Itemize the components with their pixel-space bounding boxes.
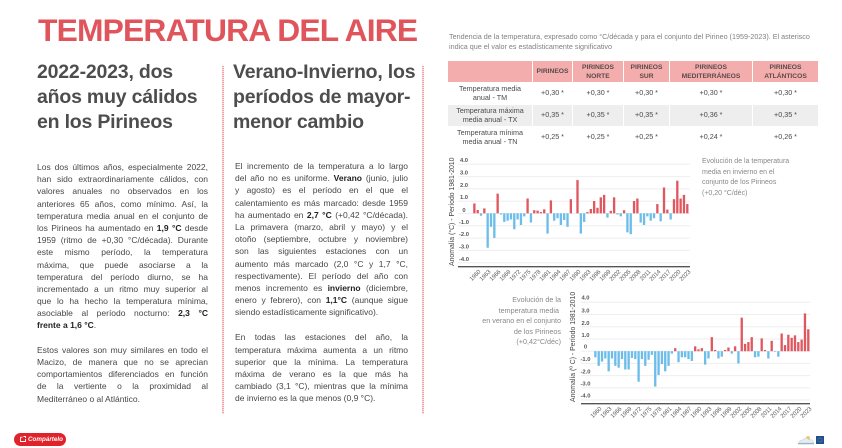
text block: left column: este mismo período, la temperatura [37,247,208,257]
text block: left column [37,162,208,404]
bar chart: summer anomaly: 1972 [630,406,643,420]
bar chart: winter anomaly: -3.0 [459,244,469,250]
table: temperature trends: SUR [639,72,654,80]
text block: left column: los Pirineos ha aumentado en 1,9 °C desde [37,223,208,233]
column divider left [222,66,224,414]
bar chart: summer anomaly: 2008 [750,406,764,420]
bar chart: summer anomaly: -1.0 [580,357,590,363]
table: temperature trends: PIRINEOS [537,68,568,75]
table: temperature trends: +0,35 * [586,110,609,119]
bar chart: winter anomaly: 1999 [599,269,612,283]
bar chart: summer anomaly: 2002 [730,406,743,420]
text block: left column: incrementado a un ritmo muy superior al [37,284,208,294]
table: temperature trends: +0,35 * [541,110,564,119]
bar chart: winter anomaly: 2020 [669,269,683,283]
text block: middle column: aumento más marcado (2,0 °C y 1,7 °C, [235,258,408,268]
bar chart: winter anomaly: 1975 [519,269,533,283]
bar chart: winter anomaly: 1981 [539,269,552,283]
table: temperature trends: Temperatura mínima [457,128,523,137]
chart note: winter: media en invierno en el [702,168,774,176]
text block: left column: temperatura del período diurno, se ha [37,272,208,282]
text block: left column: Estos valores son muy similares en todo el [37,345,208,355]
table: temperature trends: +0,30 * [700,88,722,97]
chart note: winter [702,158,790,196]
table: temperature trends: PIRINEOS [631,64,662,70]
chart note: winter: Evolución de la temperatura [702,158,789,165]
chart note: summer: Evolución de la [512,295,561,304]
chart note: summer: temperatura media [499,306,559,314]
text block: middle column: superior que la mínima. La temperatura [235,357,408,367]
table: temperature trends: Temperatura media [459,84,521,93]
text block: middle column: En todas las estaciones del año, la [235,332,408,342]
bar chart: winter anomaly: 4.0 [460,158,468,164]
table: temperature trends: +0,35 * [635,110,658,119]
bar chart: winter anomaly: 2008 [629,269,643,283]
bar chart: winter anomaly: 1978 [529,269,543,283]
text block: left column: Los dos últimos años, especialmente 2022, [37,162,208,172]
bar chart: winter anomaly: 1969 [499,269,512,283]
bar chart: summer anomaly: -4.0 [580,394,590,400]
table: temperature trends: +0,30 * [586,88,609,97]
text block: left column: asociable al período nocturno: 2,3 °C [37,308,208,318]
table: temperature trends: +0,30 * [635,88,658,97]
heading: verano-invierno: períodos de mayor- [233,86,410,108]
bar chart: summer anomaly: 4.0 [581,296,590,302]
bar chart: winter anomaly [448,157,693,283]
table: temperature trends: PIRINEOS [582,64,614,70]
bar chart: winter anomaly: 0 [462,208,466,214]
table: temperature trends: +0,25 * [586,132,609,141]
text block: middle column: y agosto) es el período en el que el [235,185,408,195]
bar chart: winter anomaly: 1972 [509,269,522,283]
heading: verano-invierno: Verano-Invierno, los [233,61,415,83]
heading: verano-invierno [233,61,415,133]
bar chart: winter anomaly: 1.0 [460,195,468,201]
bar chart: winter anomaly: 1966 [489,269,503,283]
text block: middle column: temperatura máxima aumenta a un ritmo [235,345,408,355]
table: temperature trends: ATLÁNTICOS [764,72,807,80]
bar chart: winter anomaly: -4.0 [459,257,469,263]
table: temperature trends: Temperatura máxima [456,106,524,115]
heading: 2022-2023: en los Pirineos [37,111,173,133]
heading: 2022-2023 [37,61,197,133]
bar chart: summer anomaly: 1975 [640,406,654,420]
bar chart: winter anomaly: 1987 [559,269,572,283]
text block: left column: Macizo, de manera que no se aprecian [37,357,208,367]
bar chart: summer anomaly: 0 [584,345,587,351]
heading: verano-invierno: menor cambio [233,111,364,133]
bar chart: summer anomaly: 1990 [690,406,704,420]
bar chart: winter anomaly: 2023 [679,269,693,283]
text block: middle column [235,161,408,403]
table caption: indica que el valor es estadísticamente significativo [449,42,612,51]
table: temperature trends: +0,25 * [635,132,658,141]
heading: 2022-2023: años muy cálidos [37,86,197,108]
table: temperature trends: media anual - TN [462,136,518,146]
table: temperature trends: +0,36 * [700,110,722,119]
bar chart: winter anomaly: 3.0 [460,170,468,176]
bar chart: summer anomaly: 2020 [790,406,804,420]
text block: left column: temperatura media anual en el conjunto de [37,211,208,221]
text block: left column: han sido extraordinariamente cálidos, con [37,174,208,184]
bar chart: summer anomaly: 1996 [710,406,724,420]
bar chart: winter anomaly: 1996 [589,269,603,283]
bar chart: summer anomaly: 3.0 [581,309,590,315]
table: temperature trends: +0,30 * [541,88,564,97]
text block: middle column: del año no es uniforme. Verano (junio, julio [235,173,408,183]
text block: left column: máxima, que puede asociarse a la [37,260,208,270]
bar chart: winter anomaly: 1993 [579,269,593,283]
text block: left column: comportamientos diferenciados en función [37,369,208,379]
text block: left column: de la vertiente o la proximidad al [37,381,208,391]
text block: middle column: El incremento de la temperatura a lo largo [235,161,408,171]
bar chart: summer anomaly: 2.0 [581,321,590,327]
bar chart: winter anomaly: 2014 [649,269,663,283]
bar chart: winter anomaly: 2.0 [460,183,468,189]
text block: left column: valores anuales no observados en los [37,186,208,196]
text block: middle column: La primavera (marzo, abril y mayo) y el [235,222,408,232]
bar chart: summer anomaly: 1969 [620,406,633,420]
table: temperature trends: MEDITERRÁNEOS [682,72,740,80]
table: temperature trends: anual - TM [473,92,507,102]
chart note: summer: (+0,42°C/déc) [516,337,561,346]
bar chart: summer anomaly: 1987 [680,406,693,420]
share button [14,433,66,446]
text block: middle column: son las siguientes estaciones con un [235,246,408,256]
chart note: winter: conjunto de los Pirineos [702,179,776,186]
bar chart: summer anomaly: Anomalía (º C) - Período 1981-2010 [570,292,577,402]
title: TEMPERATURA DEL AIRE [38,12,417,48]
chart note: winter: (+0,20 °C/déc) [702,190,747,196]
bar chart: summer anomaly: 2023 [800,406,814,420]
chart note: summer [482,295,561,346]
bar chart: winter anomaly: 1960 [469,269,483,283]
text block: middle column: respectivamente). El período del año con [235,271,408,281]
chart note: summer: de los Pirineos [514,326,561,336]
text block: middle column: cambiado (3,1 °C), mientras que la mínima [235,381,408,391]
table: temperature trends: NORTE [586,72,610,80]
bar chart: summer anomaly: 1999 [720,406,733,420]
text block: left column: 1959 (ritmo de +0,30 °C/década). Durante [37,235,208,245]
text block: middle column: menos incremento es invierno (diciembre, [235,283,408,293]
text block: middle column: de invierno es la que menos (0,9 °C). [235,393,375,403]
text block: left column: que lo ha hecho la temperatura mínima, [37,296,208,306]
text block: middle column: otoño (septiembre, octubre y noviembre) [235,234,408,244]
table: temperature trends [448,61,818,146]
bar chart: summer anomaly: 2014 [770,406,784,420]
table caption [449,32,810,51]
bar chart: summer anomaly: 1.0 [581,333,590,339]
column divider right [422,66,424,414]
bar chart: summer anomaly: 1963 [600,406,614,420]
heading: 2022-2023: 2022-2023, dos [37,61,173,83]
table: temperature trends: +0,35 * [774,110,797,119]
table caption: Tendencia de la temperatura, expresado como °C/década y para el conjunto del Pirineo (1959-2023). El asterisco [449,32,810,41]
bar chart: winter anomaly: 1990 [569,269,583,283]
bar chart: winter anomaly: 2002 [609,269,622,283]
text block: middle column: ha aumentado en 2,7 °C (+0,42 °C/década). [235,210,408,220]
text block: left column: frente a 1,6 °C. [37,320,96,330]
bar chart: winter anomaly: Anomalía (°C) - Período 1981-2010 [448,157,456,266]
text block: middle column: enero y febrero), con 1,1°C (aunque sigue [235,295,408,305]
bar chart: summer anomaly: 2005 [740,406,754,420]
bar chart: summer anomaly: 1993 [700,406,714,420]
text block: middle column: máxima de verano es la que más ha [235,369,408,379]
bar chart: summer anomaly: 1966 [610,406,624,420]
bar chart: summer anomaly: 1978 [650,406,664,420]
bar chart: summer anomaly: 2011 [760,406,773,419]
text block: left column: Mediterráneo o al Atlántico. [37,394,140,404]
logo: EU flag [816,436,824,444]
bar chart: summer anomaly: -3.0 [580,382,590,388]
bar chart: summer anomaly: 2017 [780,406,793,420]
bar chart: winter anomaly: 2005 [619,269,633,283]
table: temperature trends: media anual - TX [463,114,517,124]
table: temperature trends: +0,30 * [774,88,797,97]
bar chart: winter anomaly: 1963 [479,269,493,283]
share button: Compártelo [28,436,63,443]
bar chart: summer anomaly: -2.0 [580,370,590,376]
text block: middle column: siendo estadísticamente significativo). [235,307,378,317]
bar chart: summer anomaly: 1960 [590,406,604,420]
text block: middle column: calentamiento es más marcado: desde 1959 [235,198,408,208]
bar chart: summer anomaly [570,292,814,420]
table: temperature trends: PIRINEOS [695,64,727,70]
chart note: summer: en verano en el conjunto [482,316,561,325]
bar chart: winter anomaly: 1984 [549,269,563,283]
bar chart: winter anomaly: 2017 [659,269,672,283]
logo: cloud [798,436,814,444]
bar chart: summer anomaly: 1984 [670,406,684,420]
table: temperature trends: PIRINEOS [770,64,801,70]
bar chart: winter anomaly: 2011 [639,269,652,282]
bar chart: winter anomaly: -2.0 [459,232,469,238]
table: temperature trends: +0,24 * [700,132,722,141]
table: temperature trends: +0,25 * [541,132,564,141]
bar chart: winter anomaly: -1.0 [459,220,469,226]
text block: left column: anteriores 65 años, como mínimo. Así, la [37,199,208,209]
table: temperature trends: +0,26 * [774,132,797,141]
bar chart: summer anomaly: 1981 [660,406,673,420]
